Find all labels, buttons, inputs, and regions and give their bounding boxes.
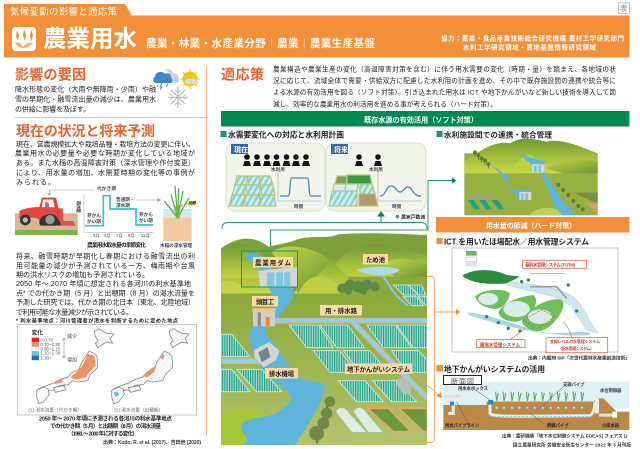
text block: current situation [15, 140, 195, 186]
illustration: river basin landscape [221, 233, 427, 445]
text block: adaptation overview: 農業構造や農業生産の変化（高温障害対策を含む）に伴う用水需要の変化（時期・量）を踏まえ、各地域の状 [273, 64, 616, 74]
greenhouses [336, 408, 383, 432]
dam [258, 267, 297, 287]
header band [4, 16, 630, 58]
illustration: facility coordination [464, 139, 598, 215]
meadow and pond [221, 410, 272, 445]
diagram: ICT water management: 基幹水管理システム (TC/TM) [525, 262, 576, 268]
text block: current situation: により、用水量の増加、水需要時期の変化等の事例が [16, 168, 195, 177]
text block: future projection [16, 252, 195, 316]
illustration: rice deep water management: 幼穂 [189, 200, 197, 205]
label: 地下かんがいシステム: 地下かんがいシステム [347, 364, 411, 373]
text block: factors: の供給に影響を及ぼす。 [15, 104, 90, 114]
icon: farmers [243, 154, 310, 166]
diagram: underground irrigation cross section: 用水水ボックス [458, 385, 488, 392]
illustration: uniform paddies [229, 176, 276, 206]
paddies [221, 285, 427, 402]
source: ICT: 出典：内閣府 SIP「次世代農林水産業創造技術」 [528, 354, 630, 362]
heading: demand and water use plan: 水需要変化への対応と水利用計画 [228, 130, 344, 140]
arrow: to facility coordination [452, 178, 456, 184]
illustration: mixed paddies [329, 175, 378, 206]
map panel: Japan streamflow change: (2) 渇水流量（出穂期） [114, 406, 163, 413]
chart: seasonal water intake: 3月 [93, 233, 100, 239]
banner: soft measures [221, 111, 630, 126]
chart: seasonal water intake: がい期 [139, 217, 153, 224]
banner: soft measures: 既存水源の有効活用（ソフト対策） [364, 116, 478, 124]
legend [32, 329, 77, 363]
label: 排水機場 [265, 368, 298, 378]
chart: present water use: 時間 [294, 203, 304, 210]
chart: seasonal water intake: 農業用水取水量の季節変化 [87, 241, 146, 249]
heading: 現在の状況と将来予測: 現在の状況と将来予測 [16, 123, 155, 139]
banner: hard measures [436, 217, 630, 232]
text block: factors: 降水形態の変化（大雨や無降雨・少雨）や融 [15, 84, 156, 94]
panel: present: 現在 [234, 145, 248, 154]
icon: crops [12, 27, 36, 51]
diagram: underground irrigation cross section: 水位制御器 [600, 387, 622, 394]
bracket: soft measures connector [222, 180, 453, 251]
arrow: to ICT [456, 309, 460, 315]
illustration: rice deep water management [160, 186, 197, 249]
highlight box: dam [242, 251, 298, 287]
chart: seasonal water intake: 7月 [116, 233, 123, 239]
label: ため池: ため池 [366, 255, 386, 264]
underground irrigation unit [397, 376, 411, 395]
text block: adaptation overview [273, 64, 616, 108]
legend: ~0.70 [42, 337, 54, 342]
legend: 0.90~1.10 [40, 346, 61, 351]
text block: adaptation overview: 減し、効率的な農業用水の利活用を進める事が考えられる（ハード対策）。 [273, 100, 497, 108]
diagram: ICT water management: 支線レベルの水管理システム [550, 338, 600, 344]
footnote: 利水基準地点: * 利水基準地点：河川管理者が渇水を判断するために定めた地点 [16, 316, 179, 324]
note: 農家数: ⊕ 農家戸数減 [395, 214, 425, 220]
label: 用・排水路 [320, 305, 362, 316]
diagram: underground irrigation cross section: 小排水路 [602, 422, 620, 429]
canals [221, 321, 427, 398]
legend: 変化 [32, 329, 43, 337]
text block: adaptation overview: 況に応じて、流域全体で需要・供給双方に配慮した水利用の計画を進め、その中で既存施設間の連携や統合等に [273, 76, 616, 85]
icon: fewer farmers [355, 154, 382, 166]
text block: current situation: ある。また水稲の高温障害対策（深水管理や作付変更） [16, 158, 195, 167]
text block: future projection: 用可能量の減少が予測されている一方、梅雨期や台風 [16, 261, 195, 270]
text block: future projection: 将来、融雪時期が早期化し春期における融雪流出の利 [16, 252, 195, 260]
source: underground irrigation [502, 432, 631, 448]
legend: 1.10~1.30 [40, 351, 61, 356]
map panel: Japan streamflow change: (1) 渇水流量（代かき期） [28, 406, 82, 413]
chart: seasonal water intake: 取水量 [75, 201, 82, 213]
diagram: underground irrigation cross section: 幹線パイプ [547, 422, 569, 429]
label: 断面図 [444, 376, 482, 386]
panel: present [226, 143, 325, 211]
legend: 減少 [67, 333, 77, 340]
label: 用・排水路: 用・排水路 [325, 306, 358, 315]
chart: future water use: 水利用 [369, 166, 383, 173]
map: 出穂期 [112, 329, 189, 404]
page tag: 表: 表 [620, 3, 628, 13]
icon: rain cloud, sun and snow [153, 69, 200, 108]
credits [441, 34, 624, 52]
text block: future projection: 期の洪水リスクの増加も予測されている。 [16, 270, 149, 279]
panel: future [326, 143, 426, 211]
map panel: Japan streamflow change [18, 324, 196, 415]
text block: factors: 雪の早期化・融雪流出量の減少は、農業用水 [15, 94, 156, 104]
heading: facility coordination: 水利施設間での連携・統合管理 [444, 130, 552, 140]
label: 地下かんがいシステム [345, 364, 412, 374]
tree [309, 396, 335, 443]
chart: seasonal water intake: 代かき期 [97, 185, 116, 192]
text block: current situation: 農業用水の必要量や必要な時期が変化している地域が [15, 148, 195, 158]
chart: seasonal water intake: 普通期・ [116, 196, 134, 203]
illustration: rice deep water management: 水稲の深水管理 [160, 242, 192, 249]
map caption: （1981 ～ 2000 年に対する変化） [68, 430, 138, 438]
label: 排水機場: 排水機場 [269, 369, 295, 378]
bracket: hard measures connector [427, 276, 456, 442]
credits: 協力：農業・食品産業技術総合研究機構 農村工学研究部門 [441, 34, 624, 42]
text block: current situation: 現在、営農規模拡大や栽培品種・栽培方法の変更に伴い、 [16, 140, 195, 148]
label: 頭首工 [252, 296, 278, 306]
chart: seasonal water intake: 4月 [104, 233, 111, 239]
text block: future projection: で利用可能な水量減少が示されている。 [16, 308, 133, 316]
chart: seasonal water intake: がい期 [87, 218, 101, 225]
map caption: での代かき期（5 月）と出穂期（8 月）の渇水流量 [50, 422, 161, 430]
source: underground irrigation: 出典：農研機構「地下水位制御システム FOEAS( フォアス )」 [502, 432, 630, 440]
label: 断面図: 断面図 [451, 376, 474, 386]
text block: future projection: 2050 年～ 2070 年頃に想定される各河川の利水基準地 [16, 279, 191, 288]
map: 代かき期 [37, 329, 114, 404]
chart: seasonal water intake: 芽かん [139, 211, 153, 218]
chart: seasonal water intake: 11月 [141, 233, 150, 239]
heading: 適応策: 適応策 [221, 66, 264, 82]
chart: seasonal water intake: 芽かん [87, 212, 101, 219]
chart: future water use [369, 166, 422, 210]
banner: hard measures: 用水量の節減（ハード対策） [486, 221, 576, 230]
credits: 水利工学研究領域・農地基盤情報研究領域 [463, 42, 597, 52]
label: 農業用ダム: 農業用ダム [255, 258, 292, 267]
source: underground irrigation: 国立農業研究所 労働安全衛生センター 2022 年 3 月刊版 [513, 442, 631, 448]
chart: present water use [271, 166, 321, 210]
diagram: ICT water management [452, 248, 618, 353]
text block: factors [15, 84, 156, 114]
diagram: underground irrigation cross section: 支線パイプ [563, 381, 585, 388]
page tag: 表 [618, 3, 630, 14]
legend: 1.30~ [40, 355, 52, 360]
illustration: tractor [15, 198, 78, 235]
subtitle: sector: 農業・林業・水産業分野｜農業｜農業生産基盤 [146, 37, 375, 50]
arrow: to underground irrigation [412, 373, 442, 398]
chart: seasonal water intake: 深水期 [116, 202, 130, 209]
panel: adaptation measures [220, 64, 631, 448]
chart: future water use: 時間 [392, 203, 402, 210]
text block: adaptation overview: よる水源の有効活用を図る（ソフト対策）。引き込まれた用水は ICT や地下かんがいなど新しい技術を導入して節 [273, 88, 616, 96]
pond: ため池 [357, 267, 400, 275]
vegetable fields [368, 408, 427, 432]
head works [252, 308, 276, 326]
diagram: underground irrigation cross section: 用水パイプライン [445, 422, 480, 429]
panel: future: 将来 [334, 145, 348, 154]
header tab: 気候変動の影響と適応策: 気候変動の影響と適応策 [10, 6, 118, 17]
woodland [337, 280, 380, 295]
panel: left column [15, 66, 206, 446]
drainage pump station [254, 342, 280, 367]
diagram: underground irrigation cross section [443, 381, 629, 430]
legend: 0.70~0.90 [40, 342, 61, 347]
heading: underground irrigation: 地下かんがいシステムの活用 [444, 364, 545, 374]
map caption [39, 414, 172, 438]
diagram: ICT water management: （配水管理システム） [558, 345, 594, 351]
label: ため池 [363, 254, 388, 264]
diagram: ICT water management: 圃場水管理システム [480, 342, 521, 348]
legend: 増加 [67, 356, 77, 363]
river [241, 253, 325, 445]
label: 頭首工: 頭首工 [256, 297, 275, 306]
text block: future projection: 点* での代かき期（5 月）と出穂期（8 月）の渇水流量を [16, 288, 195, 298]
text block: current situation: みられる。 [16, 178, 55, 186]
label: 農業用ダム [253, 257, 293, 268]
arrow: up to future [378, 212, 384, 222]
heading: 影響の要因: 影響の要因 [15, 66, 86, 82]
chart: seasonal water intake: 9月 [128, 233, 135, 239]
source: map: 出典：Kudo, R. et al. (2017)、吉田他 (2020) [103, 439, 201, 446]
title: 農業用水: 農業用水 [43, 26, 138, 52]
text block: future projection: 予測した研究では、代かき期の北日本（東北、北陸地域） [16, 298, 195, 306]
map caption: 2050 年～ 2070 年頃に予測される各河川の利水基準地点 [39, 414, 172, 422]
chart: seasonal water intake [47, 185, 161, 249]
heading: ICT distribution: ICT を用いたほ場配水／用水管理システム [444, 236, 589, 246]
chart: present water use: 水利用 [271, 166, 285, 173]
hills [221, 233, 427, 293]
